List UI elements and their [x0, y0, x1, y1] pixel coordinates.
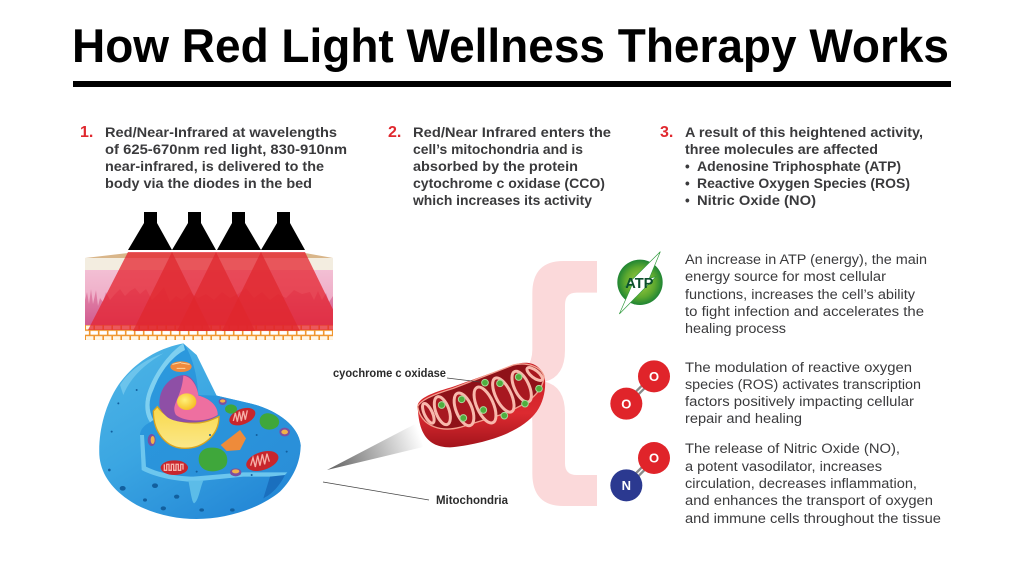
text: ROS description: [685, 360, 921, 426]
step 1 text: [80, 124, 347, 191]
step 3 text: •: [685, 193, 690, 208]
step 2 text: cytochrome c oxidase (CCO): [413, 176, 605, 191]
step 3 text: Reactive Oxygen Species (ROS): [697, 176, 910, 191]
step 3 text: Adenosine Triphosphate (ATP): [697, 159, 901, 174]
label: Mitochondria: [323, 482, 509, 507]
title: How Red Light Wellness Therapy Works: [72, 19, 949, 72]
step 3 text: [660, 124, 923, 208]
text: ATP description: functions, increases the cell’s ability: [685, 287, 915, 302]
icon: reactive oxygen molecule: O: [621, 396, 631, 411]
text: ROS description: repair and healing: [685, 411, 802, 426]
step 2 text: Red/Near Infrared enters the: [413, 125, 612, 140]
text: NO description: The release of Nitric Oxide (NO),: [685, 441, 900, 456]
text: ROS description: The modulation of reactive oxygen: [685, 360, 912, 375]
icon: four light diodes: [128, 212, 305, 250]
mitochondrion illustration: [418, 363, 545, 447]
step 2 text: 2.: [388, 124, 401, 141]
label: cyochrome c oxidase: cyochrome c oxidase: [333, 368, 446, 380]
icon: nitric oxide molecule: [610, 442, 670, 501]
zoom cone from cell to mitochondrion: [327, 423, 423, 470]
icon: ATP: ATP: [625, 276, 654, 292]
text: ATP description: [685, 252, 927, 336]
text: NO description: and enhances the transport of oxygen: [685, 493, 933, 508]
text: NO description: [685, 441, 941, 526]
text: ROS description: species (ROS) activates transcription: [685, 377, 921, 392]
text: NO description: a potent vasodilator, increases: [685, 459, 882, 474]
step 3 text: •: [685, 159, 690, 174]
pink brace: [503, 261, 597, 506]
icon: ATP: [617, 252, 663, 314]
step 2 text: absorbed by the protein: [413, 159, 578, 174]
step 3 text: three molecules are affected: [685, 142, 878, 157]
step 2 text: which increases its activity: [412, 193, 592, 208]
step 3 text: Nitric Oxide (NO): [697, 193, 816, 208]
icon: nitric oxide molecule: N: [622, 478, 631, 493]
label: cyochrome c oxidase: [333, 368, 480, 382]
step 1 text: body via the diodes in the bed: [105, 176, 312, 191]
step 2 text: cell’s mitochondria and is: [413, 142, 583, 157]
step 2 text: [388, 124, 612, 208]
text: ATP description: healing process: [685, 321, 786, 336]
step 3 text: A result of this heightened activity,: [685, 125, 923, 140]
text: ATP description: to fight infection and accelerates the: [685, 304, 924, 319]
text: NO description: circulation, decreases inflammation,: [685, 476, 917, 491]
icon: reactive oxygen molecule: [610, 360, 670, 420]
nucleus: [153, 375, 219, 448]
step 3 text: 3.: [660, 124, 673, 141]
title rule: [73, 81, 951, 87]
step 1 text: of 625-670nm red light, 830-910nm: [105, 142, 347, 157]
text: ATP description: energy source for most cellular: [685, 269, 887, 284]
icon: nitric oxide molecule: O: [649, 451, 659, 466]
step 1 text: 1.: [80, 124, 93, 141]
cell illustration: [99, 343, 301, 519]
step 1 text: Red/Near-Infrared at wavelengths: [105, 125, 337, 140]
skin cross-section with light cones: [85, 252, 343, 340]
step 3 text: •: [685, 176, 690, 191]
text: ROS description: factors positively impacting cellular: [685, 394, 915, 409]
icon: reactive oxygen molecule: O: [649, 369, 659, 384]
step 1 text: near-infrared, is delivered to the: [105, 159, 325, 174]
text: ATP description: An increase in ATP (energy), the main: [685, 252, 927, 267]
label: Mitochondria: Mitochondria: [436, 495, 509, 507]
text: NO description: and immune cells throughout the tissue: [685, 511, 941, 526]
